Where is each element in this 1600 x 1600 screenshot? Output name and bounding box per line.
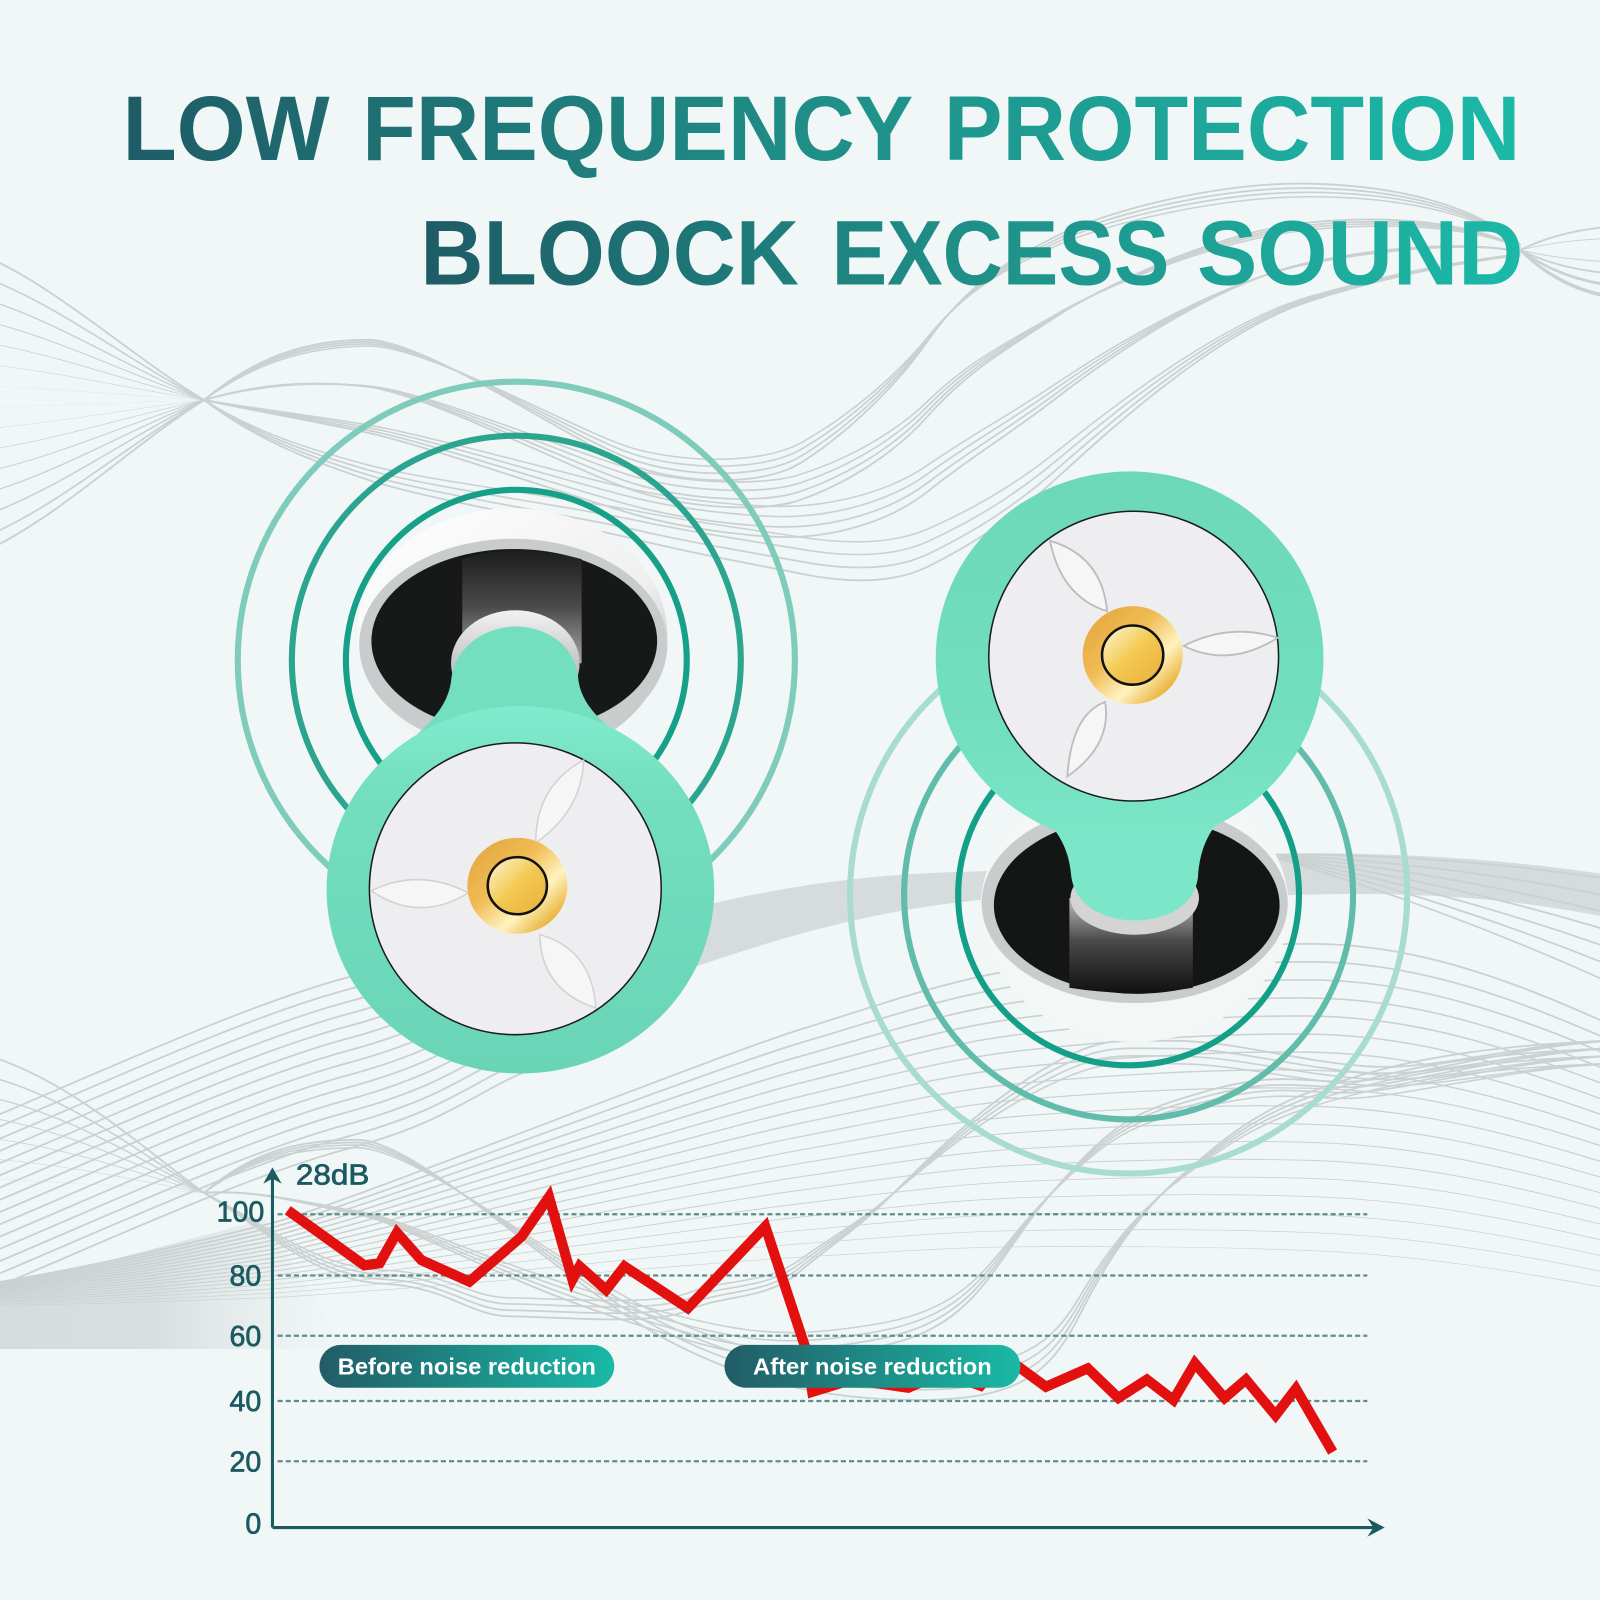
filter blades right [1050,541,1278,777]
axis labels: 20 [229,1446,261,1478]
grid lines [278,1214,1367,1461]
ear tip cup left [357,508,667,761]
title line 2: SOUND [1197,203,1523,305]
background sound waves [0,184,1600,1400]
title line 1: LOW [122,78,330,180]
axis labels: 100 [217,1196,264,1228]
red noise line [288,1197,1333,1452]
ear tip cup right [981,774,1289,1042]
pill: after noise reduction [724,1345,1020,1388]
unit label: 28dB [296,1160,369,1192]
pill: before noise reduction: Before noise reduction [338,1353,596,1379]
right earplug with sound rings [850,471,1407,1173]
title line 1 [122,78,1520,180]
title line 1: FREQUENCY [362,78,913,180]
pill: after noise reduction: After noise reduction [753,1353,992,1379]
pill: before noise reduction [319,1345,614,1388]
gold valve right [1083,606,1183,704]
axis labels: 80 [229,1261,261,1293]
gold valve left [467,838,567,934]
title line 2: EXCESS [832,203,1169,305]
noise reduction chart [217,1160,1385,1541]
earplug head right [936,471,1323,920]
sound rings left [238,382,795,939]
sound rings right [850,616,1407,1173]
earplug head left [327,627,714,1073]
axes with arrows [263,1167,1385,1537]
axis labels: 0 [245,1509,261,1541]
left earplug with sound rings [238,382,795,1073]
title line 2 [420,203,1523,305]
title [122,78,1523,305]
axis labels [217,1196,264,1541]
filter blades left [371,760,596,1008]
title line 1: PROTECTION [944,78,1520,180]
axis labels: 60 [229,1321,261,1353]
axis labels: 40 [229,1386,261,1418]
title line 2: BLOOCK [420,203,799,305]
